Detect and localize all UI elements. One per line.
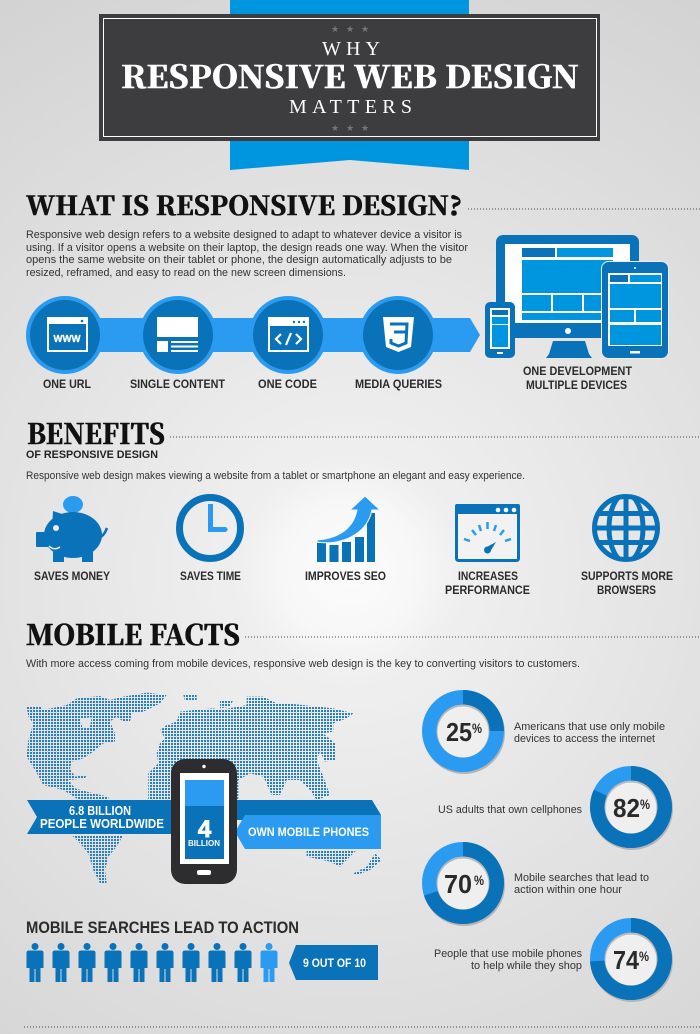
donut: 74 percent: % [639, 948, 649, 964]
donut: 74 percent: 74 [613, 945, 639, 975]
benefit: saves money: SAVES MONEY [34, 571, 110, 583]
left banner: people worldwide [27, 800, 175, 834]
left banner: people worldwide: 6.8 BILLION [69, 804, 131, 818]
title banner: ★ [361, 25, 369, 35]
title banner: ★ [346, 124, 354, 134]
title banner: ★ [331, 25, 339, 35]
heading: what is responsive design: WHAT IS RESPONSIVE DESIGN? [26, 186, 462, 223]
benefit: improves seo [305, 496, 386, 583]
mobile facts intro text: With more access coming from mobile devices, responsive web design is the key to converting visitors to customers. [26, 658, 580, 670]
icon: phone [485, 302, 515, 358]
step: one code: ONE CODE [258, 379, 317, 391]
donut: 25 percent: % [472, 720, 482, 736]
benefit: supports more browsers [581, 494, 673, 597]
devices caption: ONE DEVELOPMENT [523, 366, 632, 378]
step: one code [249, 296, 327, 391]
devices illustration [485, 235, 668, 392]
donut: 82 percent: % [640, 796, 650, 812]
benefit: increases performance [445, 504, 530, 597]
pictogram: 9 of 10 people [26, 943, 278, 982]
heading: benefits: OF RESPONSIVE DESIGN [26, 449, 158, 461]
text: phones while shopping: People that use mobile phones [434, 948, 582, 960]
left banner: people worldwide: PEOPLE WORLDWIDE [40, 817, 164, 831]
text: us adults cellphones: US adults that own cellphones [438, 804, 582, 816]
step: single content: SINGLE CONTENT [130, 379, 225, 391]
phone graphic: 4 billion [171, 759, 237, 884]
dotted world map [27, 693, 382, 883]
text: mobile searches within one hour: action within one hour [514, 884, 622, 896]
badge: 9 out of 10: 9 OUT OF 10 [303, 956, 366, 970]
title banner: RESPONSIVE WEB DESIGN [121, 52, 579, 97]
donut: 74 percent [590, 918, 673, 1002]
text: americans mobile only: devices to access the internet [514, 733, 655, 745]
heading: mobile facts: MOBILE FACTS [26, 614, 240, 654]
title banner: MATTERS [289, 96, 412, 118]
text: americans mobile only [514, 721, 665, 745]
devices caption: MULTIPLE DEVICES [526, 380, 627, 392]
donut: 82 percent: 82 [613, 793, 640, 823]
heading: mobile searches lead to action: MOBILE SEARCHES LEAD TO ACTION [26, 919, 299, 937]
donut: 25 percent: 25 [446, 717, 472, 747]
benefit: saves money [34, 496, 110, 583]
title banner [99, 14, 600, 141]
right banner: own mobile phones [230, 800, 381, 849]
right banner: own mobile phones: OWN MOBILE PHONES [248, 825, 369, 839]
intro paragraph: using. If a visitor opens a website on their laptop, the design reads one way. When the visitor [26, 242, 468, 254]
donut: 70 percent [422, 842, 505, 926]
phone graphic: 4 billion: 4 [198, 816, 212, 843]
donut: 70 percent: % [474, 872, 484, 888]
benefit: saves time: SAVES TIME [180, 571, 241, 583]
text: mobile searches within one hour: Mobile searches that lead to [514, 872, 649, 884]
phone graphic: 4 billion: BILLION [188, 838, 220, 848]
benefits intro text: Responsive web design makes viewing a website from a tablet or smartphone an elegant and easy experience. [26, 470, 525, 482]
text: phones while shopping [434, 948, 582, 972]
title banner: ★ [346, 25, 354, 35]
title banner: WHY [322, 38, 380, 60]
intro paragraph: opens the same website on their tablet or phone, the design automatically adjusts to be [26, 254, 452, 266]
icon: tablet [602, 262, 668, 358]
badge: 9 out of 10 [289, 945, 378, 980]
benefit: increases performance: INCREASES [458, 571, 518, 583]
devices caption [523, 366, 632, 392]
text: phones while shopping: to help while they shop [471, 960, 582, 972]
donut: 82 percent [590, 766, 673, 850]
step: one url: ONE URL [43, 379, 91, 391]
intro paragraph [26, 229, 468, 279]
step: media queries [355, 296, 442, 391]
donut: 70 percent: 70 [444, 869, 472, 899]
title banner: ★ [331, 124, 339, 134]
intro paragraph: resized, reframed, and easy to read on the new screen dimensions. [26, 267, 346, 279]
process band arrow [50, 318, 480, 352]
benefit: improves seo: IMPROVES SEO [305, 571, 386, 583]
benefit: supports more browsers: SUPPORTS MORE [581, 571, 673, 583]
icon: desktop monitor [496, 235, 639, 358]
text: mobile searches within one hour [514, 872, 649, 896]
benefit: supports more browsers: BROWSERS [597, 585, 656, 597]
heading: benefits: BENEFITS [27, 413, 165, 453]
step: one url: WWW [54, 334, 81, 345]
title banner: ★ [361, 124, 369, 134]
ribbon behind title [230, 0, 469, 170]
step: media queries: MEDIA QUERIES [355, 379, 442, 391]
step: single content [130, 296, 225, 391]
step: one url [26, 296, 104, 391]
donut: 25 percent [422, 690, 505, 774]
benefit: saves time [180, 498, 241, 583]
text: americans mobile only: Americans that use only mobile [514, 721, 665, 733]
benefit: increases performance: PERFORMANCE [445, 585, 530, 597]
intro paragraph: Responsive web design refers to a website designed to adapt to whatever device a visitor is [26, 229, 462, 241]
